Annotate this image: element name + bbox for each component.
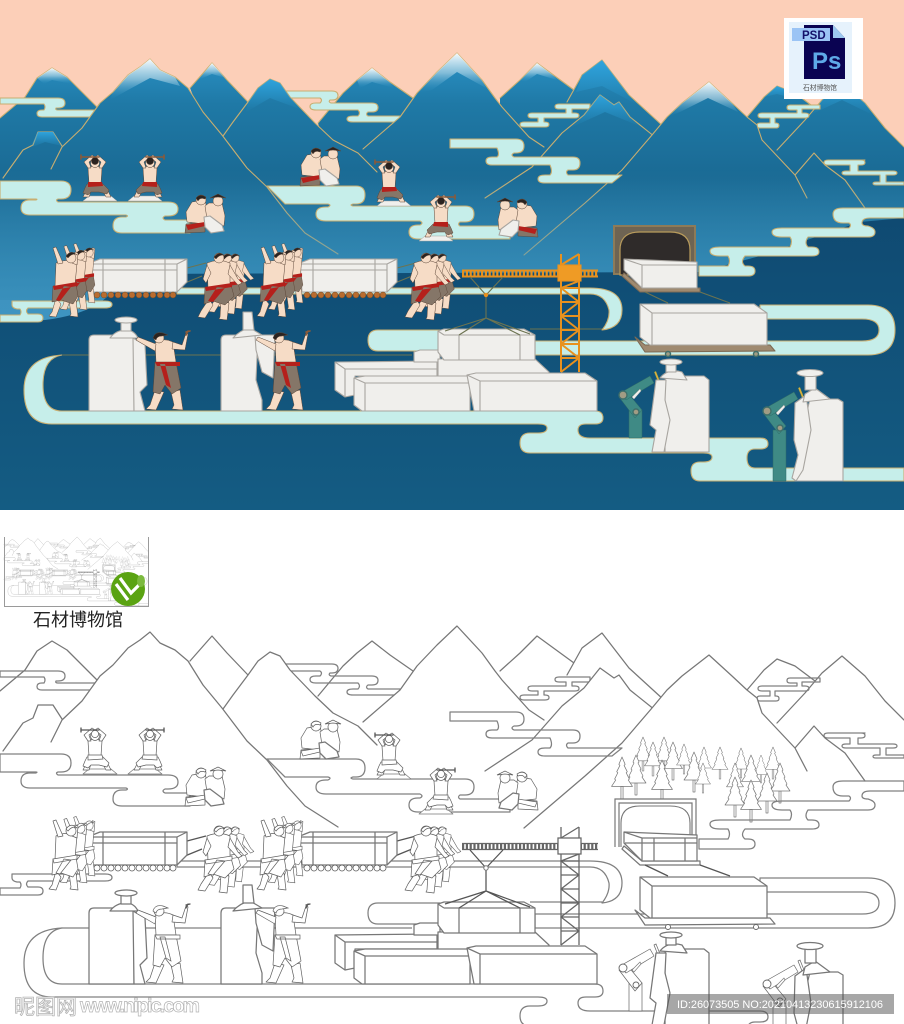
outline robot arm two [763,942,843,1024]
stone carts with pullers [49,243,461,320]
outline carts and pullers [49,816,461,893]
outline mountains [0,626,904,873]
pine forest [612,737,790,822]
PSD file badge: PSD [802,30,826,42]
outline stone pile [335,902,597,984]
robot arm carving statue one [619,359,709,452]
outline robot arm one [619,932,709,1024]
large stone on flat cart [635,304,775,356]
back mountain range [0,60,904,330]
outline hammering workers [81,728,455,814]
outline clouds [0,712,904,895]
sky background [0,0,904,510]
lower haze over mountain foot [0,170,904,320]
tunnel entrance [614,226,695,275]
crane [462,254,598,372]
white lower panel [0,510,904,1024]
outline flat cart stone [635,877,775,930]
stone sliding out of tunnel [622,259,730,303]
outline tunnel [615,799,696,847]
front mountain range [3,53,865,300]
PSD file badge [784,18,863,99]
thumbnail caption: 石材博物馆 [33,610,123,630]
PSD file badge: Ps [812,48,841,75]
line art panel: stone museum outline version [0,626,904,1024]
outline stone carriers [185,720,538,810]
image ID bar: ID:26073505 NO:20210413230615912106 [677,999,883,1011]
watermark logo [14,995,200,1019]
dark blue ground [0,218,904,510]
watermark logo: www.nipic.com [79,995,200,1017]
outline crane [462,827,598,945]
outline hook [445,850,530,908]
image ID bar [667,994,894,1014]
workers carrying stones [185,147,538,237]
conveyor cloud roads [24,288,904,481]
outline tunnel stone [622,832,730,876]
watermark logo: 昵图网 [14,996,77,1019]
stone pile [335,329,597,411]
robot arm carving statue two [763,370,843,481]
outline sculptor two [221,885,310,984]
sculptor with scholar statue [221,312,310,411]
swirling clouds upper [0,139,904,322]
thumbnail preview [4,537,149,607]
far clouds [0,91,904,185]
quarry workers hammering [81,155,455,241]
crane hook and ropes [445,277,530,335]
sculptor with straw-hat statue [89,317,190,411]
outline sculptor one [89,890,190,984]
PSD file badge: 石材博物馆 [803,83,837,92]
outline conveyor roads [24,861,904,1024]
colour illustration panel: stone museum scene [0,53,904,510]
